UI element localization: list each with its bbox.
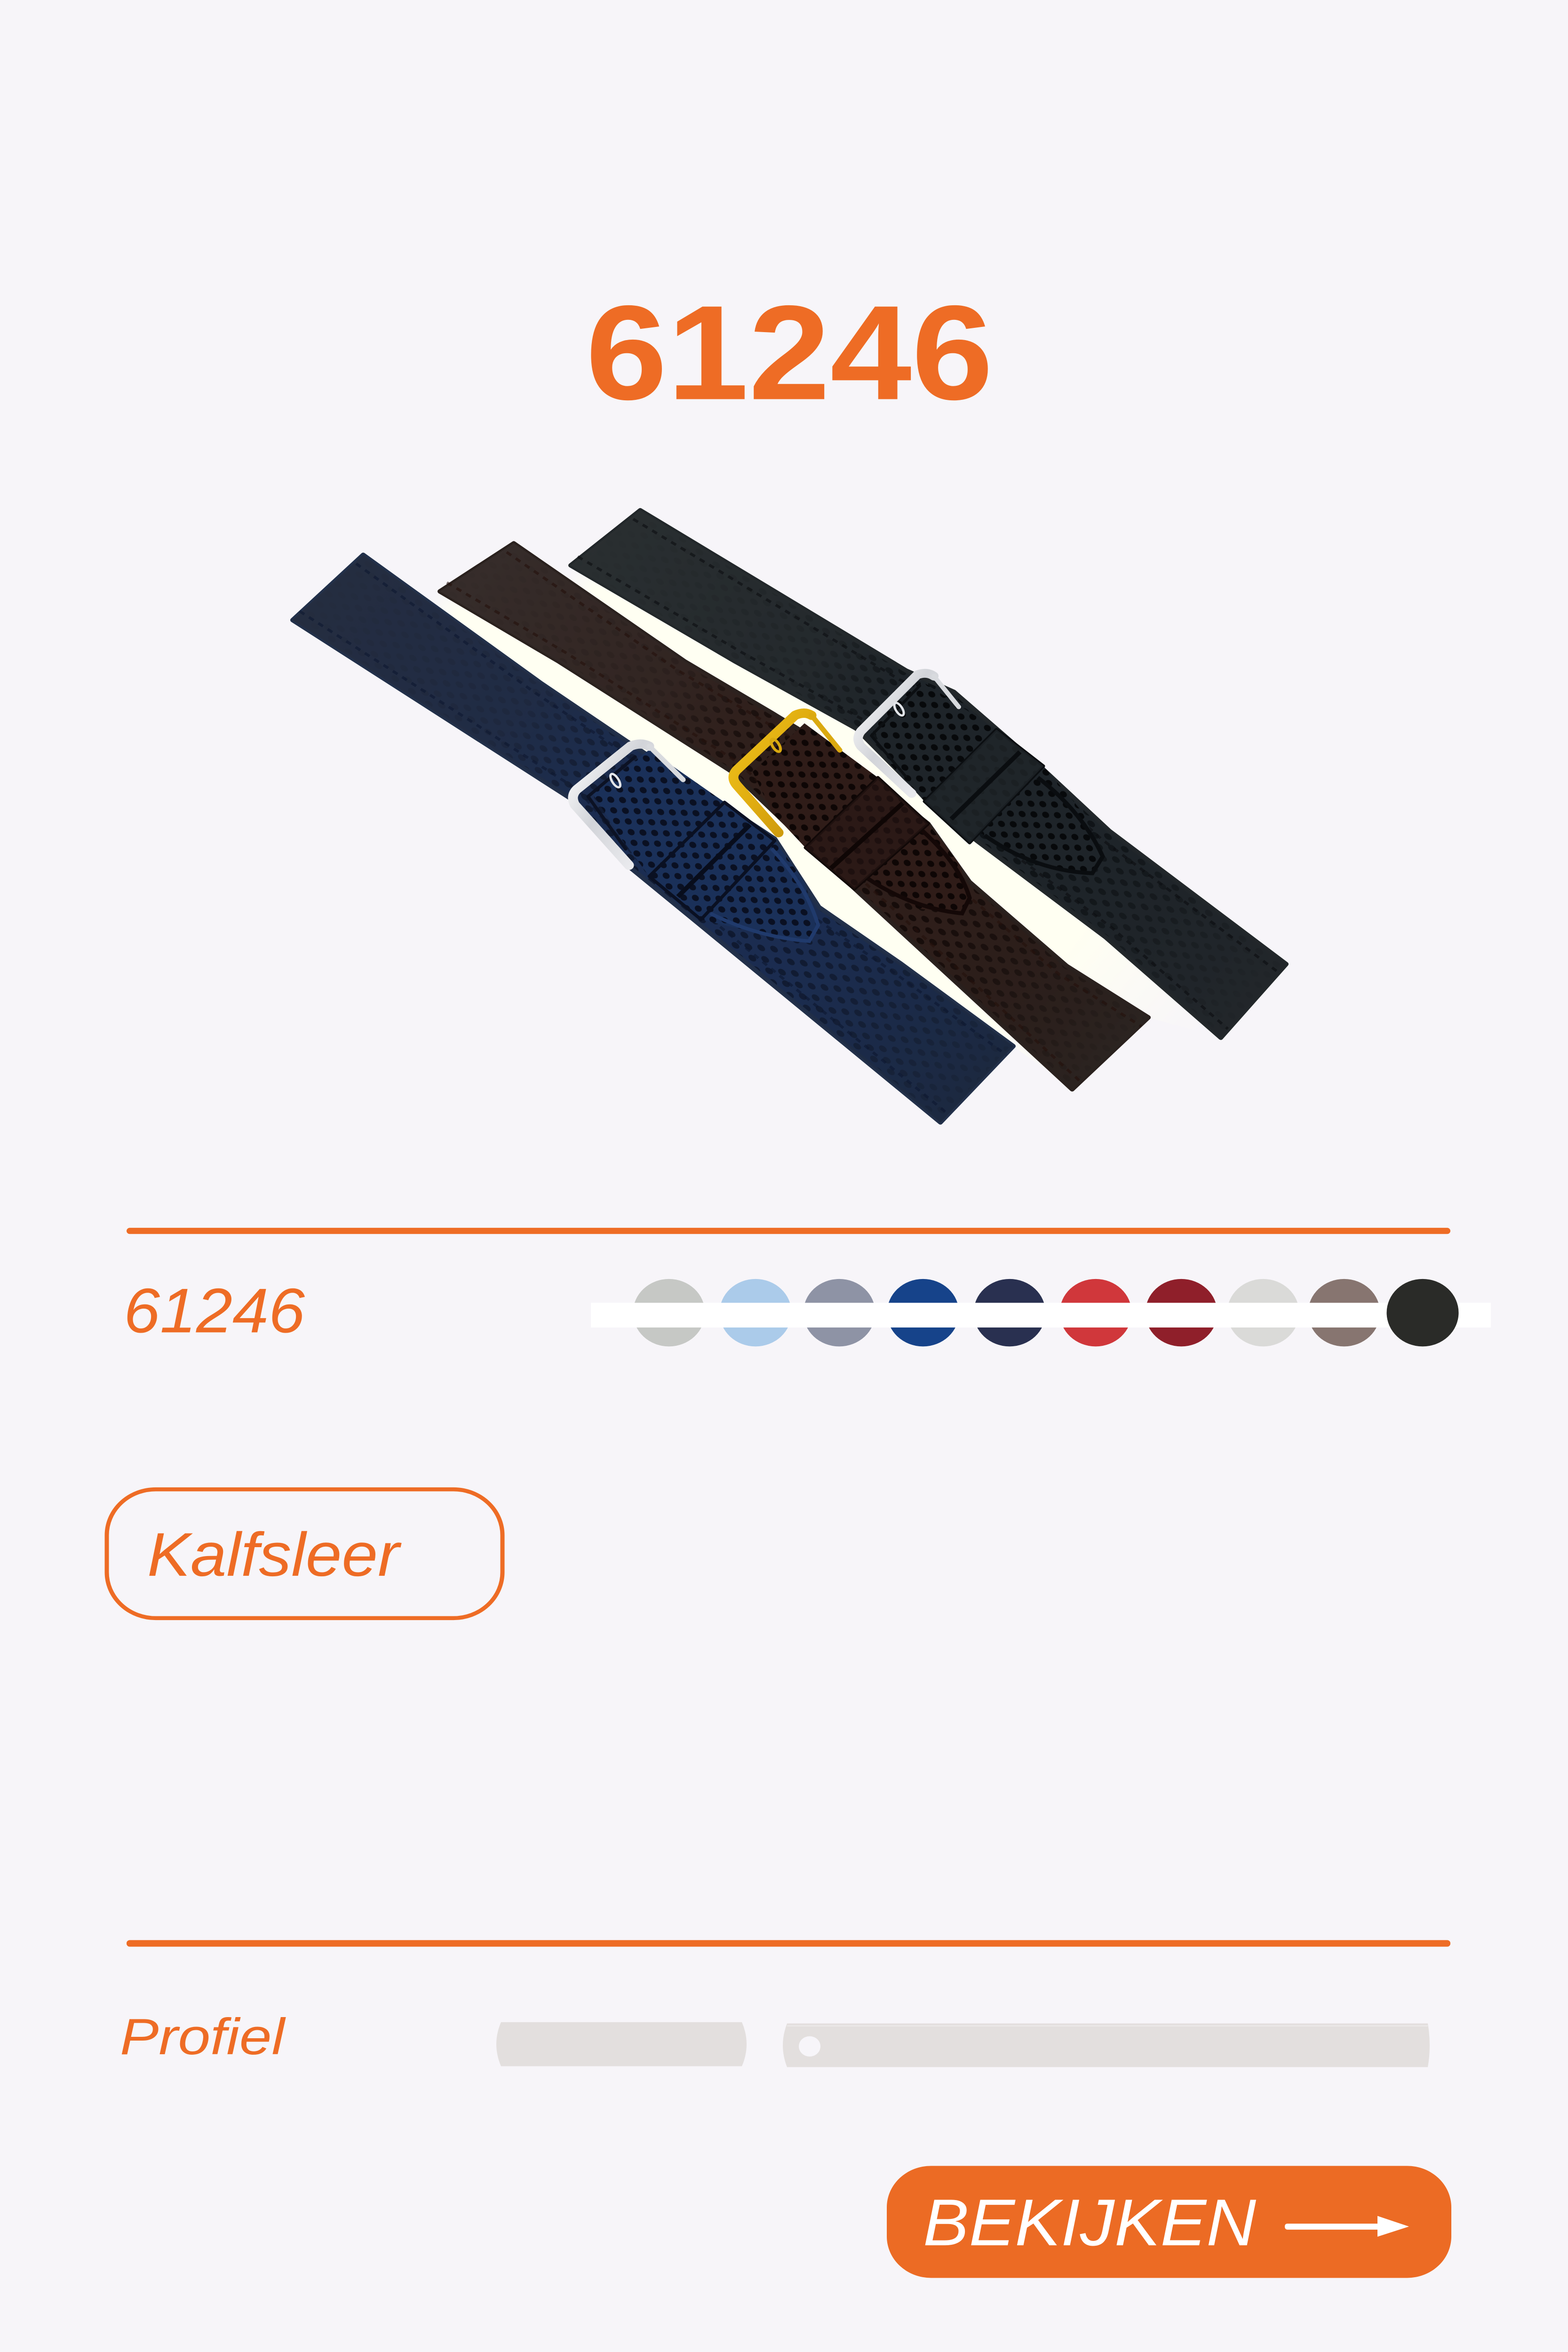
black strap tail [870,682,1103,873]
swatch: black [1387,1279,1458,1346]
highlight gap between brown and black straps [571,565,1221,1038]
blue strap keeper loops [649,802,775,920]
swatch: pale grey [1227,1279,1299,1346]
button body [887,2166,1451,2278]
icon: right arrow [1285,2216,1409,2237]
brown strap keeper loops [805,778,928,889]
tag outline [107,1489,502,1618]
brown strap [440,543,1148,1089]
divider rule top [127,1228,1450,1234]
call to action button [887,2166,1451,2278]
highlight gap between blue and brown straps [414,591,1072,1089]
swatch: taupe [1308,1279,1380,1346]
profile strap silhouette: long piece [783,2024,1430,2067]
swatch: light blue [720,1279,791,1346]
title: product number: 61246 [586,277,993,428]
profile strap silhouette: short piece [496,2022,747,2066]
swatch: navy [974,1279,1045,1346]
divider rule bottom [127,1940,1450,1947]
swatch: red [1059,1279,1132,1346]
swatch: dark red [1145,1279,1218,1346]
model number label: 61246 [124,1276,305,1346]
blue strap tail [593,750,818,941]
gold buckle [733,713,840,833]
profile label: Profiel [120,2008,286,2065]
silver buckle [858,673,959,794]
product photo: three watch straps [293,510,1286,1122]
strap hole [799,2036,820,2057]
black strap keeper loops [924,730,1043,843]
black strap [571,510,1286,1038]
button label: BEKIJKEN [923,2185,1257,2259]
swatch: royal blue [887,1279,959,1346]
swatch: light grey [633,1279,705,1346]
blue strap [293,555,1013,1122]
brown strap tail [753,723,970,914]
colour swatches [591,1279,1491,1346]
silver buckle [573,744,683,865]
white band across swatches [591,1303,1491,1327]
tag label: Kalfsleer [147,1520,402,1589]
swatch: blue grey [804,1279,875,1346]
material tag: Kalfsleer [107,1489,502,1618]
